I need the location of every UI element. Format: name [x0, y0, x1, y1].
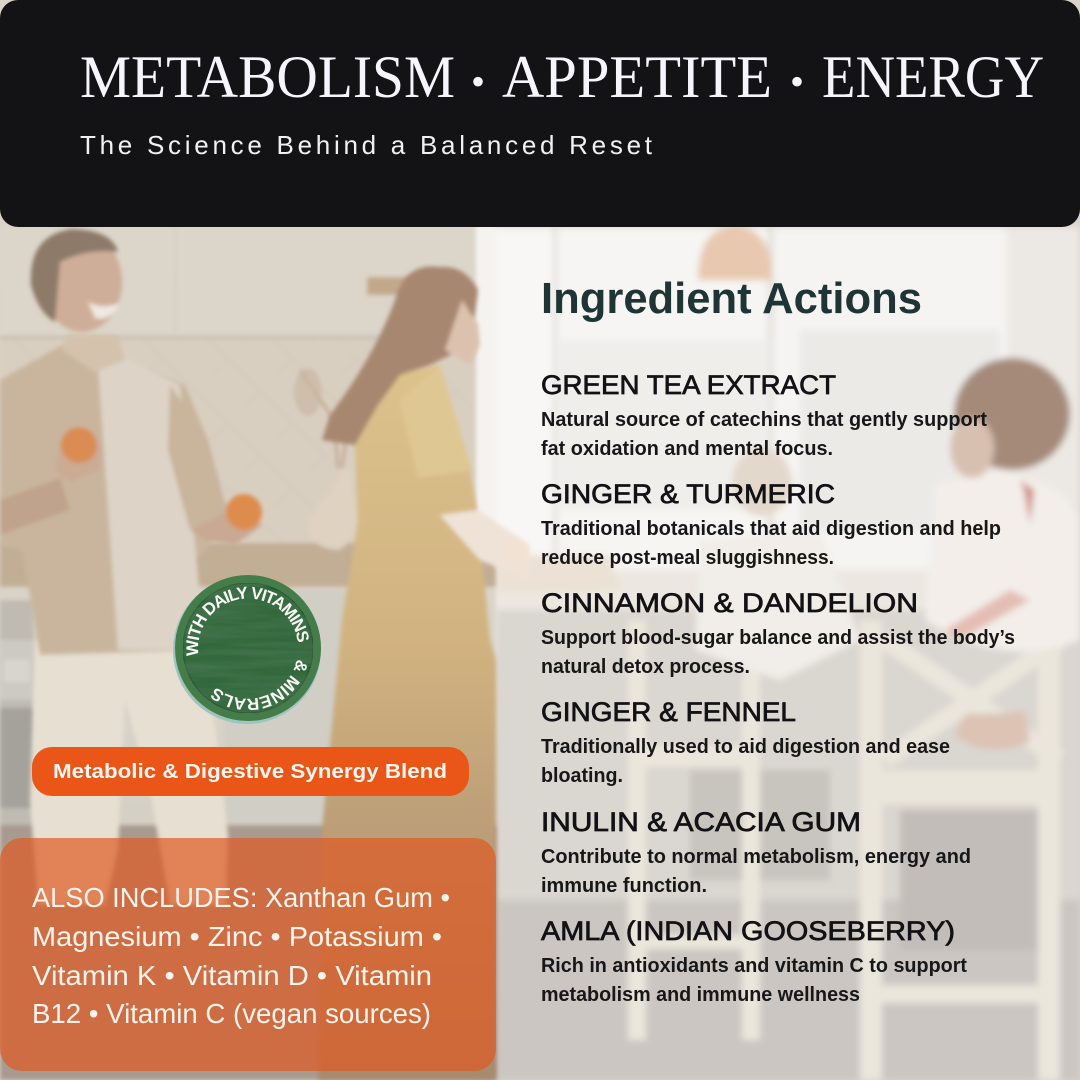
ingredient: inulin and acacia gum: [541, 807, 971, 897]
panel: also includes: [0, 838, 496, 1071]
ingredient: cinnamon and dandelion: CINNAMON & DANDELION: [541, 588, 918, 618]
heading: Ingredient Actions: Ingredient Actions: [541, 274, 922, 323]
man holding oranges: [0, 229, 262, 905]
ingredient: ginger and turmeric: Traditional botanicals that aid digestion and help: [541, 518, 1001, 540]
ingredient: ginger and fennel: Traditionally used to aid digestion and ease: [541, 736, 950, 758]
ingredient: green tea extract: GREEN TEA EXTRACT: [541, 370, 836, 400]
badge: with daily vitamins and minerals: [173, 575, 321, 724]
title: •: [790, 59, 804, 104]
title: ENERGY: [822, 44, 1044, 110]
ingredient: amla: Rich in antioxidants and vitamin C to support: [541, 955, 967, 977]
badge: with daily vitamins and minerals: & MINERALS: [211, 660, 307, 710]
ingredient: green tea extract: fat oxidation and mental focus.: [541, 438, 833, 460]
label pill: blend name: [32, 747, 469, 796]
ingredient: ginger and fennel: [541, 697, 950, 787]
photo background: kitchen scene: [0, 227, 1080, 1080]
ingredient: amla: AMLA (INDIAN GOOSEBERRY): [541, 916, 955, 946]
ingredient: ginger and turmeric: GINGER & TURMERIC: [541, 479, 835, 509]
woman in yellow dress: [318, 266, 530, 1080]
header band: [0, 0, 1080, 227]
ingredient: cinnamon and dandelion: [541, 588, 1015, 678]
ingredient: inulin and acacia gum: immune function.: [541, 875, 707, 897]
ingredient: ginger and fennel: bloating.: [541, 765, 623, 787]
ingredient: green tea extract: [541, 370, 987, 460]
ingredient: green tea extract: Natural source of catechins that gently support: [541, 409, 987, 431]
panel: also includes: Vitamin K • Vitamin D • Vitamin: [32, 960, 432, 991]
right photo area: bright window and dining stools: [476, 227, 1080, 1080]
ingredient: ginger and turmeric: reduce post-meal sluggishness.: [541, 547, 834, 569]
title: [80, 44, 1044, 110]
title: •: [471, 59, 485, 104]
panel: also includes: B12 • Vitamin C (vegan sources): [32, 998, 431, 1029]
ingredient: ginger and fennel: GINGER & FENNEL: [541, 697, 796, 727]
left photo area: cabinets, tiles, counter, floor: [0, 227, 496, 1080]
ingredient: cinnamon and dandelion: Support blood-sugar balance and assist the body’s: [541, 627, 1015, 649]
ingredient: inulin and acacia gum: INULIN & ACACIA GUM: [541, 807, 861, 837]
ingredient: amla: metabolism and immune wellness: [541, 984, 860, 1006]
ingredient: inulin and acacia gum: Contribute to normal metabolism, energy and: [541, 846, 971, 868]
title: METABOLISM: [80, 44, 455, 110]
ingredient: amla: [541, 916, 967, 1006]
badge: with daily vitamins and minerals: WITH DAILY VITAMINS: [186, 586, 309, 656]
ingredient: ginger and turmeric: [541, 479, 1001, 569]
subtitle: The Science Behind a Balanced Reset: [80, 130, 653, 160]
ingredient: cinnamon and dandelion: natural detox process.: [541, 656, 750, 678]
label pill: blend name: Metabolic & Digestive Synergy Blend: [53, 761, 447, 783]
panel: also includes: Magnesium • Zinc • Potassium •: [32, 921, 442, 952]
panel: also includes: ALSO INCLUDES: Xanthan Gum •: [32, 882, 450, 913]
title: APPETITE: [502, 44, 772, 110]
